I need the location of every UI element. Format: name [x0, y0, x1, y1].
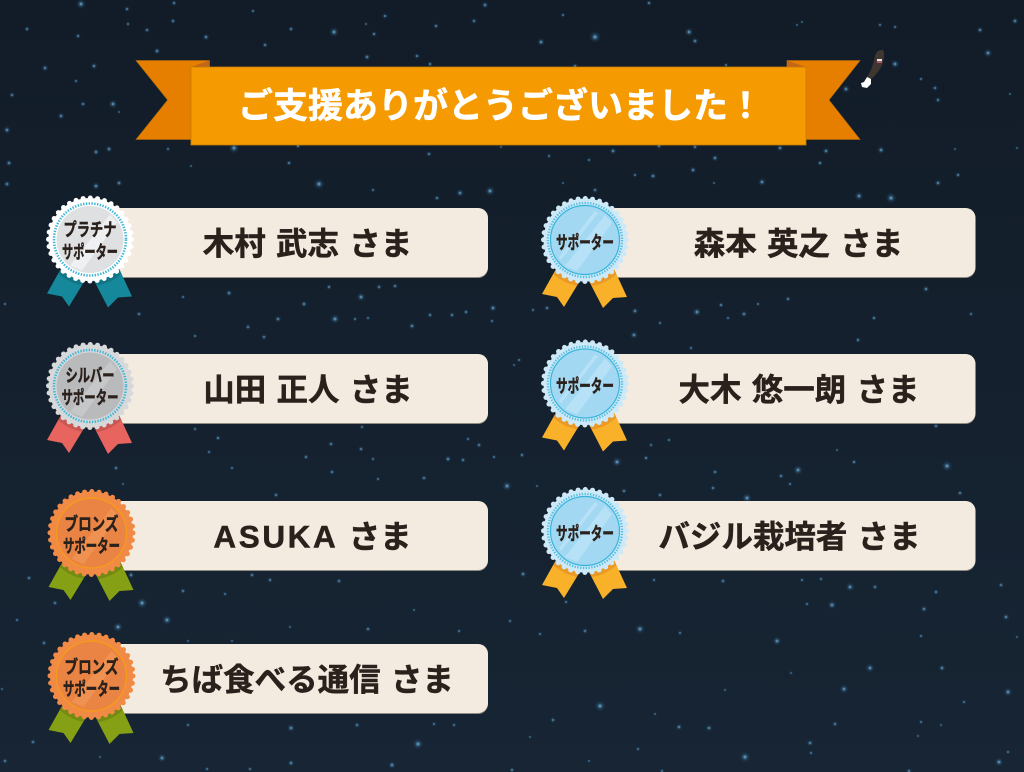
panel: バジル栽培者: バジル栽培者 さま — [658, 518, 921, 554]
icon: platinum badge: サポーター — [62, 242, 118, 262]
panel: 山田 正人: 山田 正人 さま — [203, 372, 413, 408]
panel: 木村 武志: 木村 武志 さま — [203, 226, 412, 262]
panel: 大木 悠一朗 — [590, 354, 976, 424]
badge label: サポーター — [556, 376, 614, 396]
panel: 大木 悠一朗: 大木 悠一朗 さま — [678, 372, 920, 408]
panel: ちば食べる通信 — [100, 644, 488, 714]
panel: 森本 英之: 森本 英之 さま — [694, 226, 903, 262]
icon: bronze badge: サポーター — [63, 536, 120, 556]
icon: platinum badge — [44, 193, 136, 308]
panel: バジル栽培者 — [590, 501, 976, 571]
icon: silver badge — [44, 340, 136, 454]
badge label: プラチナ — [64, 220, 116, 240]
icon: supporter badge — [538, 194, 632, 308]
badge label: サポーター — [556, 232, 614, 253]
title text: ご支援ありがとうございました！ — [238, 86, 763, 126]
badge label: ブロンズ — [64, 656, 118, 678]
badge label: シルバー — [66, 366, 114, 386]
icon: comet — [861, 50, 884, 88]
badge label: ブロンズ — [64, 514, 118, 534]
icon: supporter badge — [538, 337, 632, 452]
panel: 森本 英之 — [590, 208, 976, 278]
icon: bronze badge: サポーター — [63, 678, 120, 700]
panel: 山田 正人 — [100, 354, 488, 424]
panel: ASUKA — [100, 501, 488, 571]
panel: ASUKA: ASUKA さま — [213, 518, 412, 554]
panel: 木村 武志 — [100, 208, 488, 278]
banner right tail — [787, 60, 860, 140]
panel: ちば食べる通信: ちば食べる通信 さま — [160, 662, 454, 698]
banner left tail — [136, 60, 210, 140]
icon: silver badge: サポーター — [62, 387, 118, 408]
icon: bronze badge — [45, 630, 138, 744]
icon: bronze badge — [45, 486, 138, 601]
title banner — [136, 60, 860, 145]
badge label: サポーター — [556, 523, 614, 544]
icon: supporter badge — [538, 484, 632, 599]
